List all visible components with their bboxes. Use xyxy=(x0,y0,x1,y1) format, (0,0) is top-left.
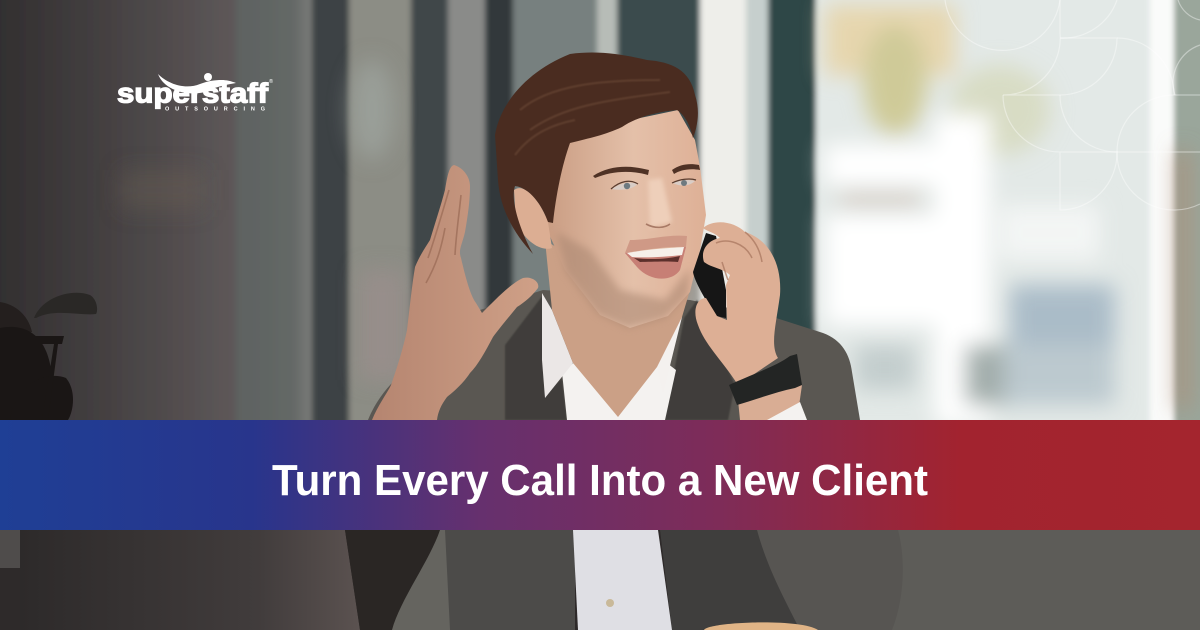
logo swoosh xyxy=(158,74,236,93)
jacket lower xyxy=(345,530,440,630)
wrist xyxy=(738,385,802,420)
phone xyxy=(693,233,726,318)
nose xyxy=(646,178,672,228)
face xyxy=(545,110,706,328)
hand finger shadows xyxy=(426,190,461,283)
shirt cuff xyxy=(767,402,807,420)
logo dot xyxy=(204,73,212,81)
jacket upper xyxy=(368,290,860,420)
shirt button xyxy=(606,599,614,607)
stubble shading xyxy=(556,232,690,328)
neck xyxy=(545,240,690,417)
finger shadows xyxy=(716,232,762,280)
eyebrows xyxy=(593,164,700,178)
raised hand xyxy=(372,165,538,420)
title: Turn Every Call Into a New Client xyxy=(272,456,928,505)
watch xyxy=(729,354,802,405)
phone hand xyxy=(695,222,780,385)
coffee cup rim xyxy=(704,622,818,630)
lower shirt xyxy=(573,530,672,630)
banner xyxy=(0,420,1200,530)
panel: man on phone xyxy=(368,53,860,420)
decorative arcs xyxy=(945,0,1200,210)
blurred cafe background xyxy=(0,0,1200,440)
eyes xyxy=(611,179,696,190)
lower scene xyxy=(0,530,1200,630)
logo subtitle: OUTSOURCING xyxy=(165,106,265,112)
hair highlights xyxy=(515,80,670,155)
logo wordmark: superstaff xyxy=(117,78,269,108)
ear xyxy=(514,188,552,249)
laptop xyxy=(20,530,360,630)
logo: superstaff outsourcing xyxy=(117,73,273,112)
plant silhouette xyxy=(0,293,97,420)
jacket lapel shading xyxy=(505,295,735,420)
hair xyxy=(495,53,698,254)
logo registered mark: ® xyxy=(269,78,273,85)
smile xyxy=(625,236,687,279)
white shirt and collar xyxy=(542,293,682,420)
